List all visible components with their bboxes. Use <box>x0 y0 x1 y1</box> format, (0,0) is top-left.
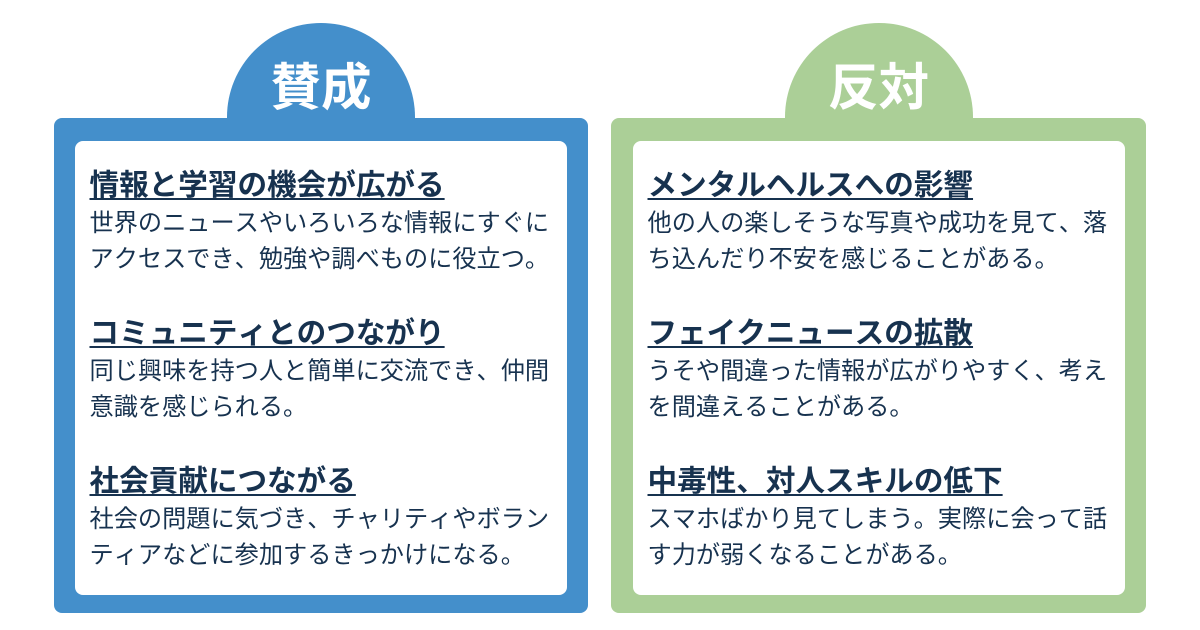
point heading: メンタルヘルスへの影響: メンタルヘルスへの影響 <box>648 169 973 202</box>
point text: 中毒性: す力が弱くなることがある。 <box>648 542 962 569</box>
tab: 反対 dome <box>784 23 972 119</box>
panel body: white <box>633 140 1125 594</box>
heading: 反対: 反対 <box>828 59 929 116</box>
point text: 中毒性 <box>648 506 1107 569</box>
point text: 社会貢献 <box>90 506 549 569</box>
point text: つながり <box>90 358 549 421</box>
point text: フェイクニュース: うそや間違った情報が広がりやすく、考え <box>648 358 1107 385</box>
point text: 社会貢献: ティアなどに参加するきっかけになる。 <box>90 542 525 569</box>
point text: 情報と学習: アクセスでき、勉強や調べものに役立つ。 <box>90 246 549 273</box>
panel: 反対 <box>611 23 1146 613</box>
point text: フェイクニュース: を間違えることがある。 <box>648 394 914 421</box>
panel body: white <box>75 140 567 594</box>
point text: 情報と学習: 世界のニュースやいろいろな情報にすぐに <box>90 210 549 237</box>
point text: メンタルヘルス: ち込んだり不安を感じることがある。 <box>648 246 1059 273</box>
point text: つながり: 同じ興味を持つ人と簡単に交流でき、仲間 <box>90 358 549 385</box>
point text: メンタルヘルス: 他の人の楽しそうな写真や成功を見て、落 <box>648 210 1107 237</box>
panel frame: green <box>611 118 1146 613</box>
panel frame: blue <box>54 118 588 613</box>
point text: 社会貢献: 社会の問題に気づき、チャリティやボラン <box>90 506 549 533</box>
point text: メンタルヘルス <box>648 210 1107 273</box>
tab: 賛成 dome <box>227 23 415 119</box>
panel: 賛成 <box>54 23 588 613</box>
point text: フェイクニュース <box>648 358 1107 421</box>
point text: 中毒性: スマホばかり見てしまう。実際に会って話 <box>648 506 1107 533</box>
point heading: 社会貢献につながる: 社会貢献につながる <box>90 465 356 498</box>
point heading: コミュニティとのつながり: コミュニティとのつながり <box>90 317 445 350</box>
point heading: 情報と学習の機会が広がる: 情報と学習の機会が広がる <box>90 169 445 202</box>
heading: 賛成: 賛成 <box>270 59 372 116</box>
point text: つながり: 意識を感じられる。 <box>90 394 307 421</box>
point heading: 中毒性、対人スキルの低下: 中毒性、対人スキルの低下 <box>648 465 1003 498</box>
point heading: フェイクニュースの拡散: フェイクニュースの拡散 <box>648 317 973 350</box>
point text: 情報と学習 <box>90 210 549 273</box>
